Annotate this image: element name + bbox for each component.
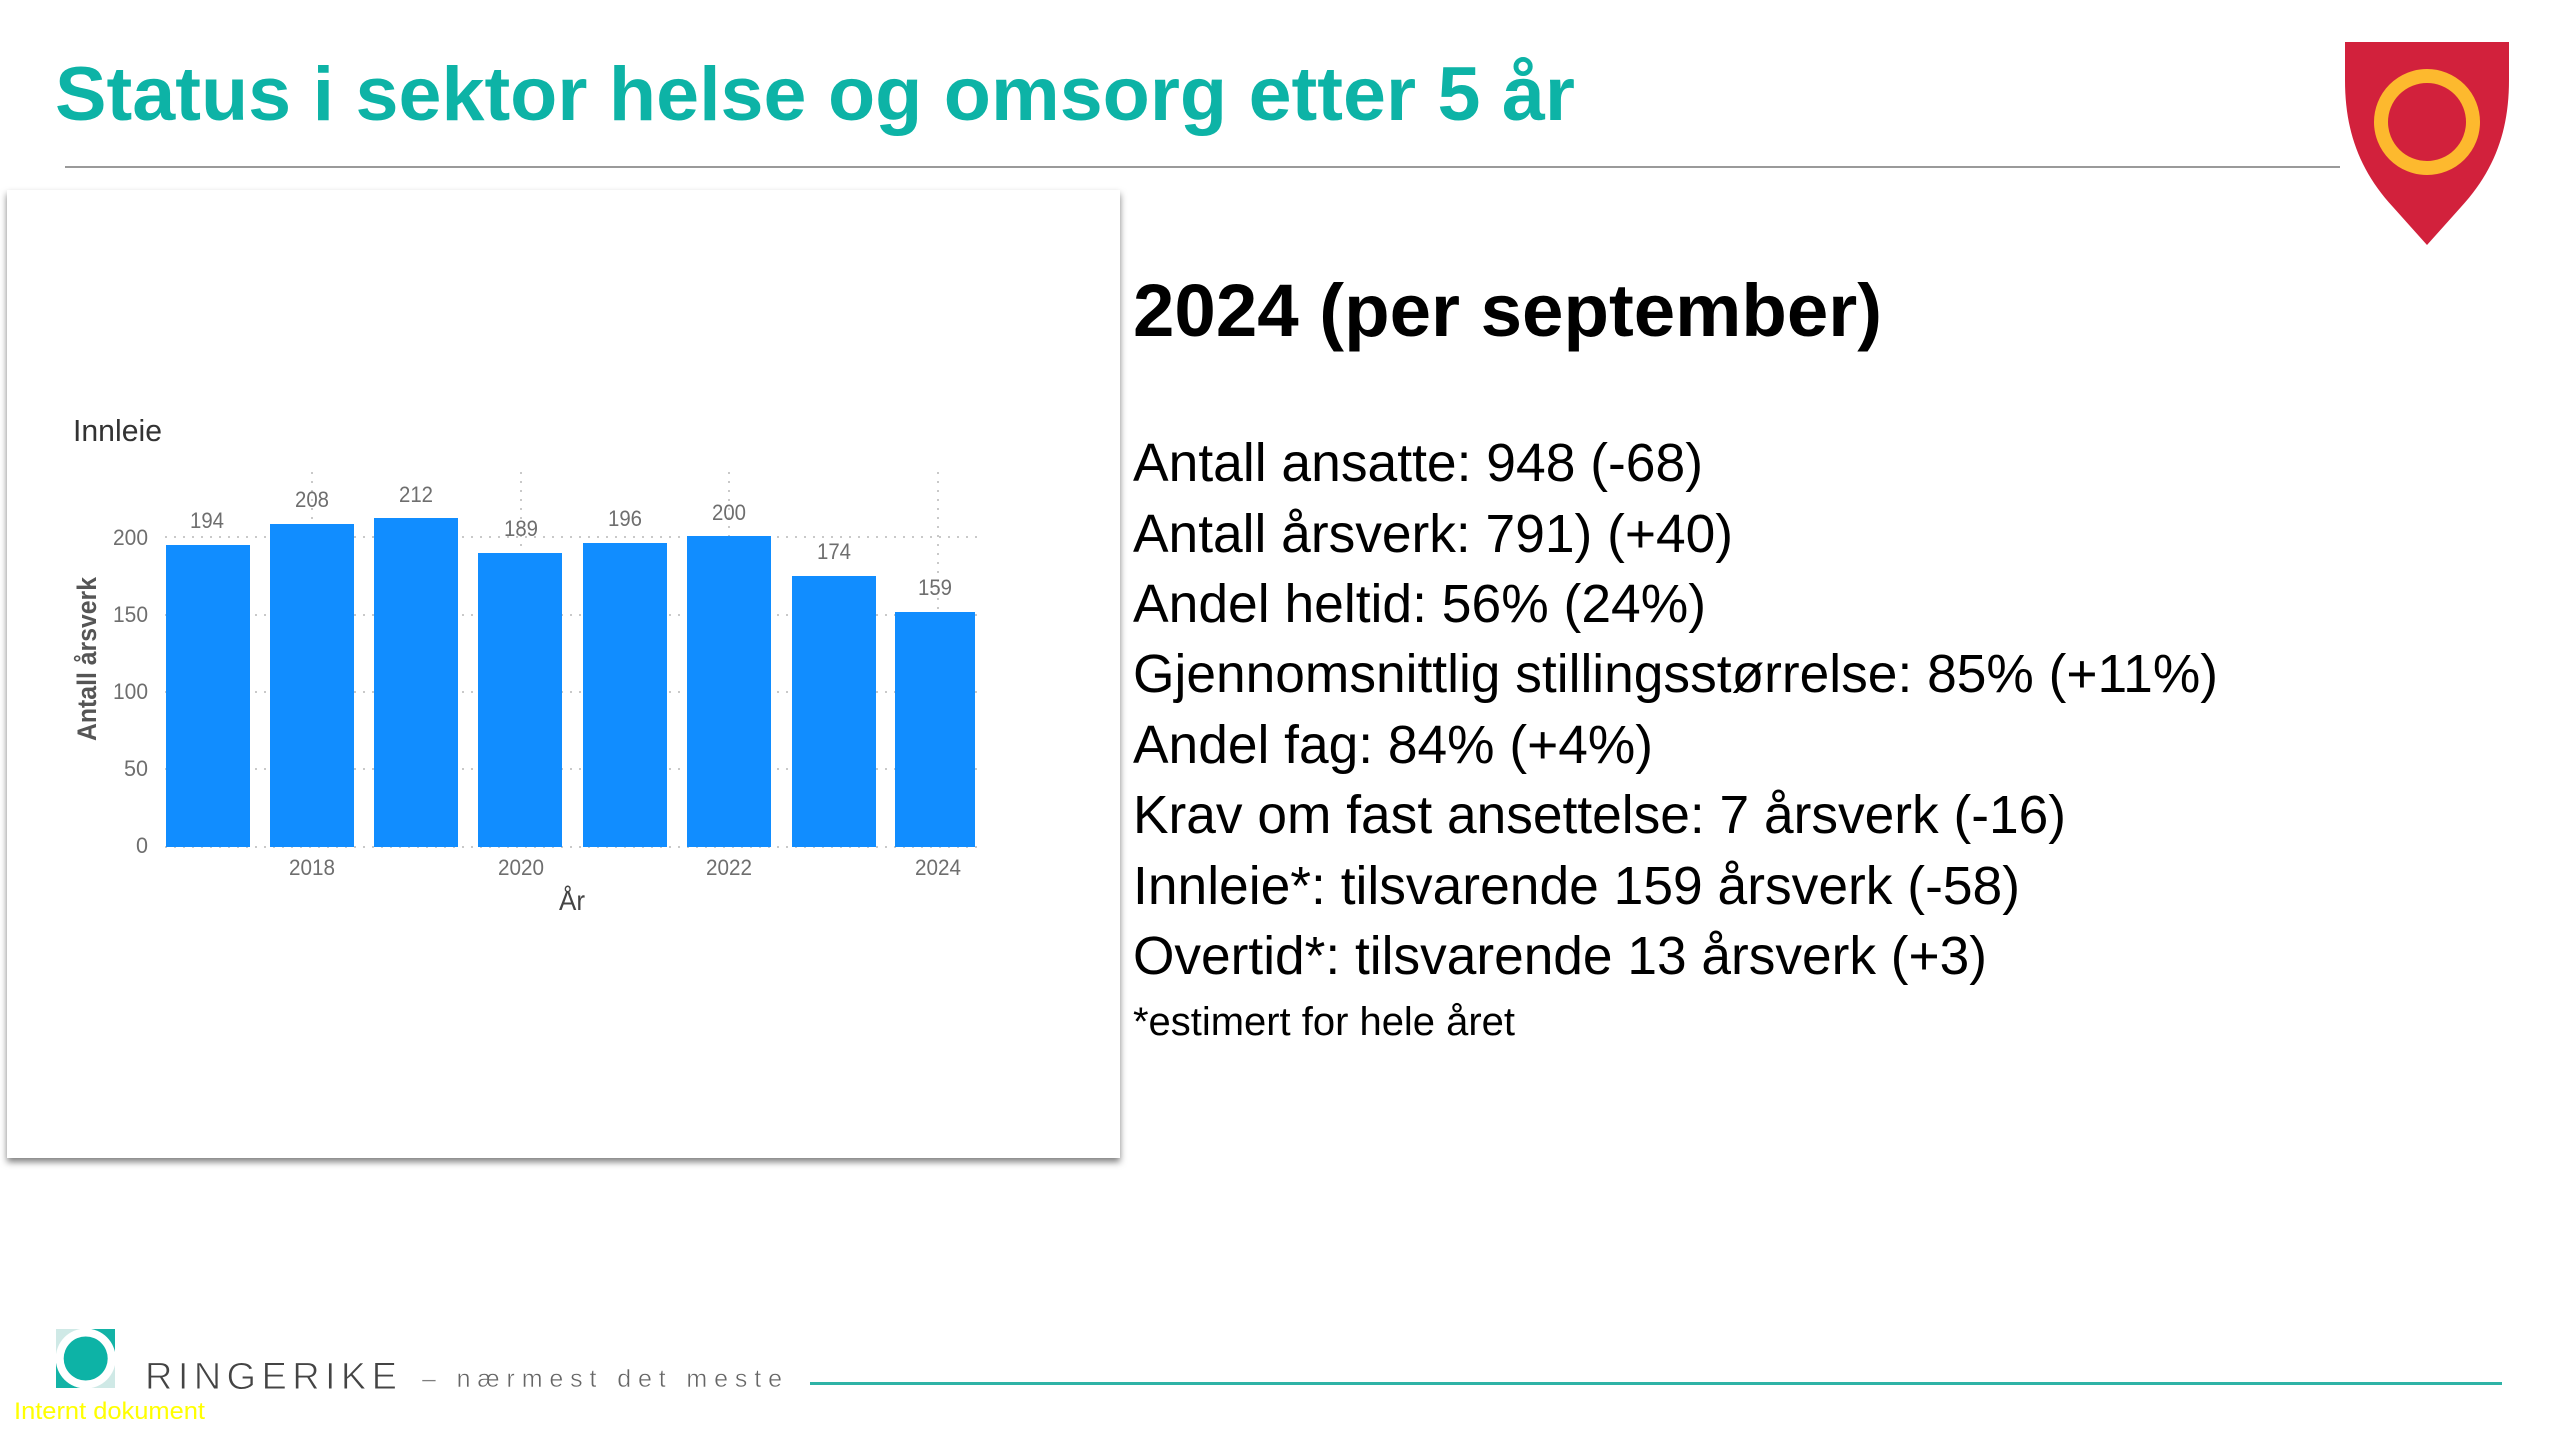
- footer tagline: – nærmest det meste: [422, 1365, 782, 1393]
- panel: chart card: [7, 190, 1120, 1158]
- bar chart: innleie per year: 212: [399, 482, 433, 507]
- key figures list: Andel fag: 84% (+4%): [1133, 715, 1653, 775]
- bar chart: innleie per year: 208: [295, 487, 329, 512]
- bar chart: innleie per year: 2018: [289, 855, 335, 880]
- heading: 2024: 2024 (per september): [1133, 269, 1882, 352]
- key figures list: Andel heltid: 56% (24%): [1133, 574, 1706, 634]
- bar chart: innleie per year: 2020: [498, 855, 544, 880]
- icon: municipal shield: [2345, 42, 2509, 245]
- bar chart: innleie per year: 196: [608, 506, 642, 531]
- bar chart: innleie per year: 200: [113, 525, 148, 550]
- key figures list: Overtid*: tilsvarende 13 årsverk (+3): [1133, 926, 1987, 986]
- bar chart: innleie per year: 0: [136, 833, 148, 858]
- footer wordmark: RINGERIKE: [145, 1356, 397, 1398]
- title: Status i sektor helse og omsorg etter 5 år: [55, 52, 1575, 137]
- key figures list: Antall ansatte: 948 (-68): [1133, 433, 1703, 493]
- bar chart: innleie per year: 150: [113, 602, 148, 627]
- bar chart: innleie per year: 100: [113, 679, 148, 704]
- bar chart: innleie per year: 174: [817, 539, 851, 564]
- internal document label: Internt dokument: [14, 1398, 205, 1425]
- key figures list: Innleie*: tilsvarende 159 årsverk (-58): [1133, 856, 2020, 916]
- footer logo mark: [56, 1328, 116, 1388]
- bar chart: innleie per year: 2022: [706, 855, 752, 880]
- bar chart: innleie per year: 50: [124, 756, 148, 781]
- y axis title: Antall årsverk: [72, 576, 102, 741]
- chart title: Innleie: [73, 413, 162, 448]
- bar chart: innleie per year: 159: [918, 575, 952, 600]
- bar chart: innleie per year: 2024: [915, 855, 961, 880]
- key figures list: [1133, 433, 2218, 986]
- bar chart: innleie per year: 189: [504, 516, 538, 541]
- bar chart: innleie per year: 194: [190, 508, 224, 533]
- key figures list: Krav om fast ansettelse: 7 årsverk (-16): [1133, 785, 2066, 845]
- x axis title: År: [559, 885, 585, 916]
- footnote: *estimert for hele året: [1133, 1000, 1515, 1044]
- bar chart: innleie per year: 200: [712, 500, 746, 525]
- bar chart: innleie per year: [113, 472, 982, 880]
- key figures list: Antall årsverk: 791) (+40): [1133, 504, 1733, 564]
- key figures list: Gjennomsnittlig stillingsstørrelse: 85% (+11%): [1133, 644, 2218, 704]
